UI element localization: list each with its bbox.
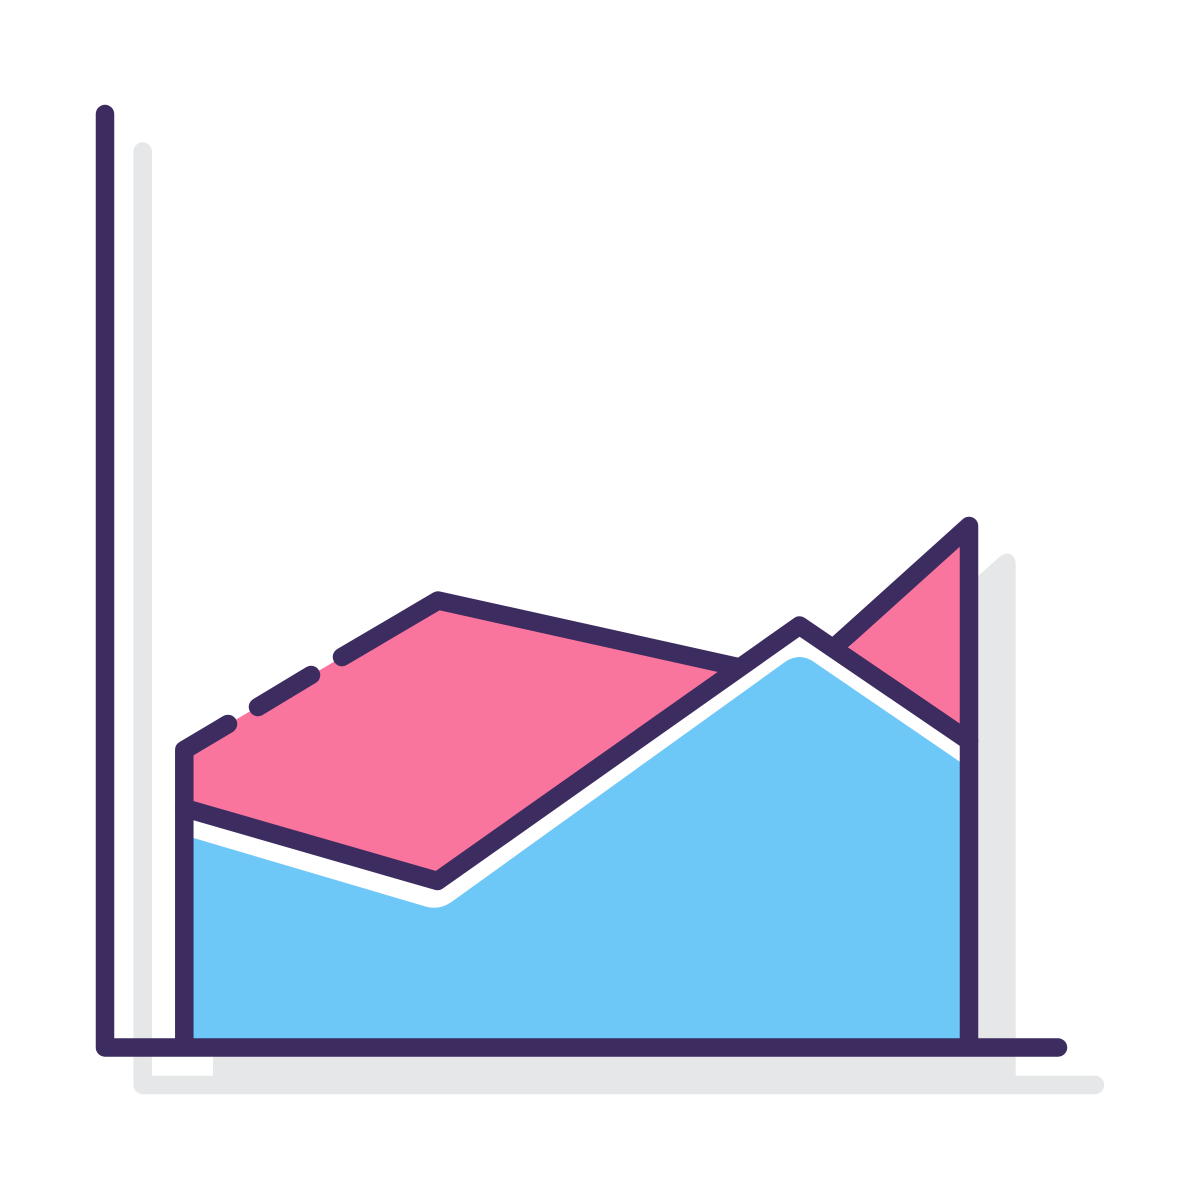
chart axes <box>105 114 1058 1048</box>
chart outlines <box>105 114 1058 1048</box>
pink area <box>184 526 969 881</box>
pink series line: upper section <box>342 600 738 667</box>
white gap band <box>184 626 969 1048</box>
blue series line <box>184 626 969 881</box>
pink series line: middle dash <box>258 675 311 707</box>
blue area <box>184 657 969 1048</box>
drop shadow <box>143 152 1095 1085</box>
pink series line: right peak <box>838 526 969 1045</box>
pink series line: dashed start <box>184 724 228 1045</box>
